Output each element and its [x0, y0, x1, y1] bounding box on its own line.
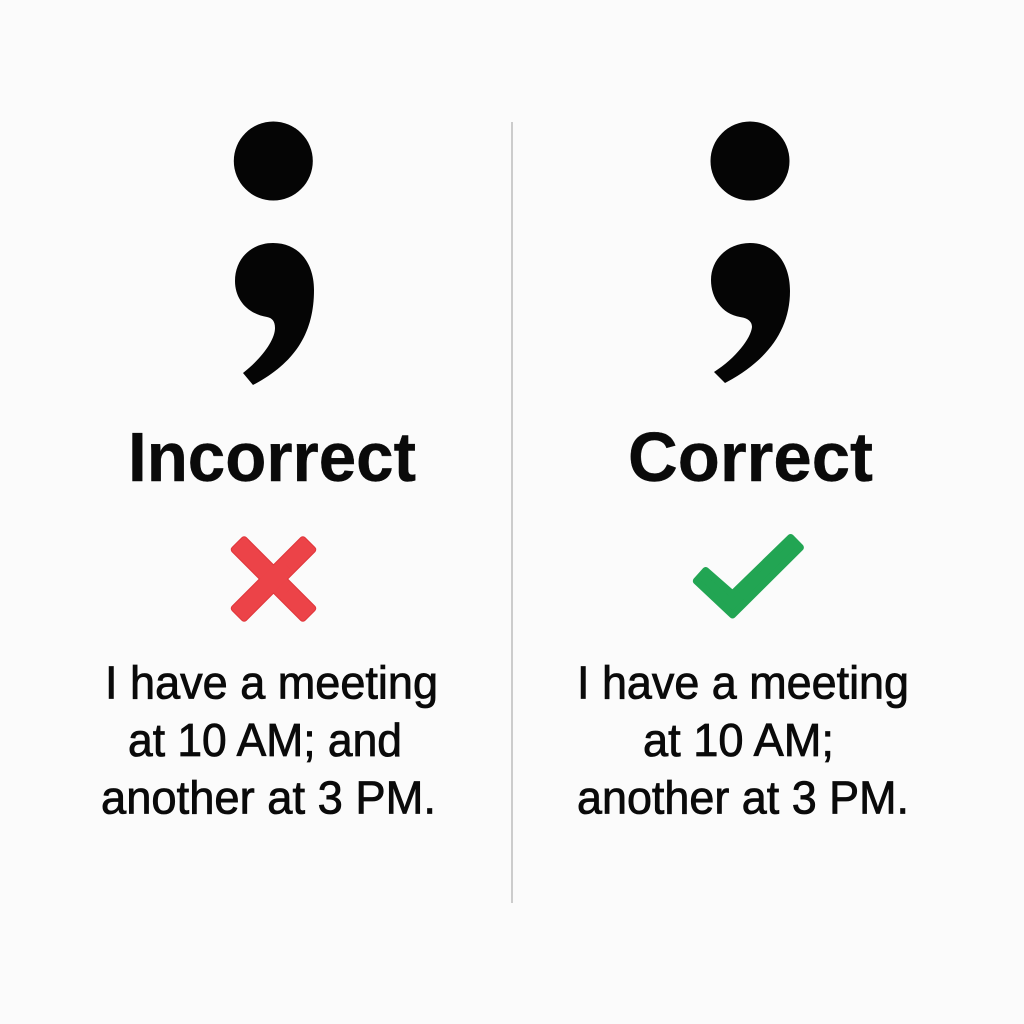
heading: Correct: Correct: [628, 418, 873, 496]
icon: semicolon (correct): [710, 122, 790, 383]
icon: red cross: [230, 536, 317, 622]
text: correct example: another at 3 PM.: [577, 772, 909, 824]
text: incorrect example: I have a meeting: [105, 656, 438, 708]
text: correct example: [577, 656, 909, 824]
panel: correct: [577, 122, 909, 824]
text: incorrect example: [101, 656, 438, 824]
text: incorrect example: another at 3 PM.: [101, 772, 436, 824]
text: correct example: at 10 AM;: [643, 714, 834, 766]
panel: incorrect: [101, 122, 438, 824]
icon: green check: [696, 538, 800, 615]
heading: Incorrect: Incorrect: [128, 418, 416, 496]
text: incorrect example: at 10 AM; and: [128, 714, 402, 766]
text: correct example: I have a meeting: [577, 656, 909, 708]
icon: semicolon (incorrect): [234, 122, 314, 385]
